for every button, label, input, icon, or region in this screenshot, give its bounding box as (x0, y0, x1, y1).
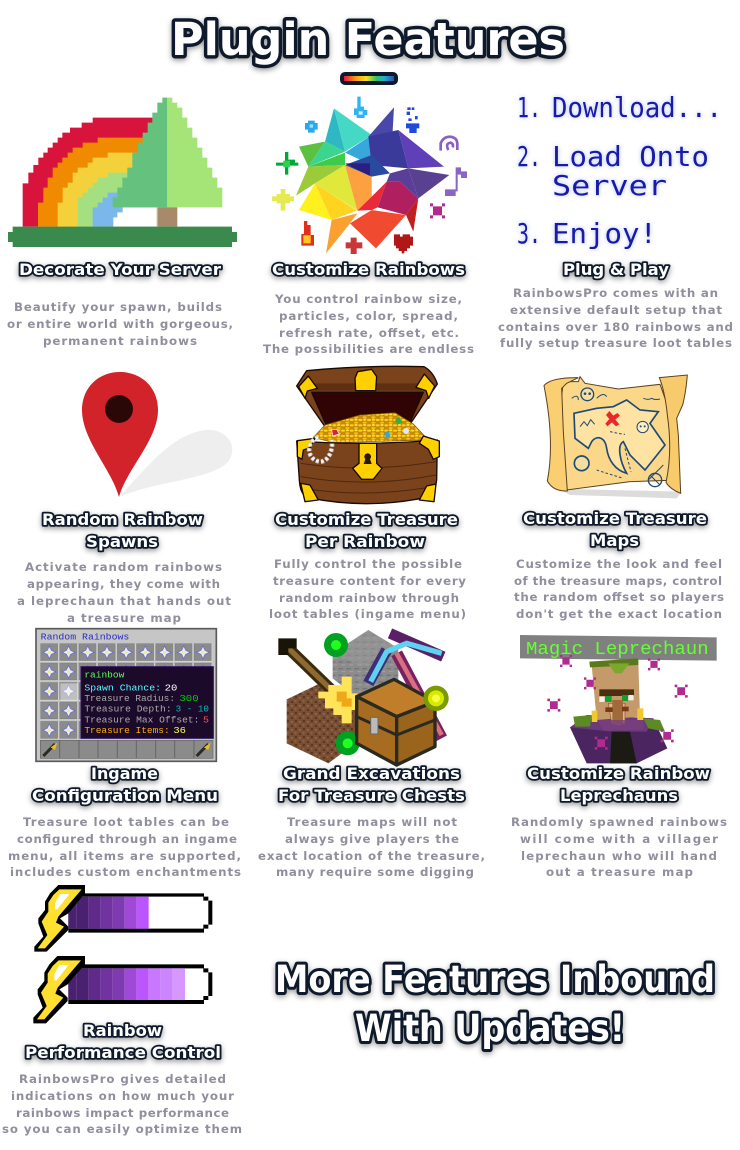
icon: inventory menu screenshot: 36 (173, 726, 186, 736)
steps list: 3. (517, 217, 541, 250)
panel: random rainbow spawns (17, 372, 232, 625)
heading: Customize Rainbows (272, 260, 465, 279)
panel: customize treasure maps (514, 375, 724, 621)
description: Beautify your spawn, builds (14, 300, 222, 314)
panel: customize rainbows (263, 97, 474, 356)
description: treasure content for every (273, 574, 466, 588)
description: the random offset so players (514, 590, 724, 604)
heading (523, 509, 707, 550)
description: extensive default setup that (510, 303, 722, 317)
steps list: Server (552, 169, 667, 202)
description: menu, all items are supported, (8, 849, 241, 863)
description (511, 815, 727, 879)
description: RainbowsPro gives detailed (19, 1072, 226, 1086)
icon: energy bars with lightning bolts (33, 885, 212, 1023)
heading: Per Rainbow (305, 532, 425, 551)
description: rainbows impact performance (16, 1106, 229, 1120)
description (17, 560, 231, 625)
icon: inventory menu screenshot: 300 (179, 694, 199, 704)
description (498, 286, 733, 350)
heading: For Treasure Chests (278, 786, 465, 805)
steps list (517, 91, 722, 250)
description: RainbowsPro comes with an (513, 286, 718, 300)
description: Randomly spawned rainbows (511, 815, 727, 829)
description: always give players the (285, 832, 459, 846)
description (7, 300, 233, 348)
title: Plugin Features (171, 13, 565, 66)
heading: Decorate Your Server (19, 260, 221, 279)
heading: Configuration Menu (32, 786, 218, 805)
description: The possibilities are endless (263, 342, 474, 356)
steps list: 2. (517, 140, 541, 173)
description: configured through an ingame (17, 832, 237, 846)
description (269, 557, 466, 621)
description: or entire world with gorgeous, (7, 317, 233, 331)
panel: grand excavations (258, 630, 485, 879)
description: Customize the look and feel (516, 557, 722, 571)
description: Fully control the possible (274, 557, 462, 571)
description: fully setup treasure loot tables (500, 336, 732, 350)
steps list: 1. (517, 91, 541, 124)
description: of the treasure maps, control (514, 574, 722, 588)
steps list: Download... (552, 91, 722, 124)
heading (275, 510, 458, 551)
description: indications on how much your (11, 1089, 234, 1103)
icon: pixel rainbow and tree (8, 98, 237, 247)
steps list: Load Onto (552, 140, 709, 173)
description: out a treasure map (546, 865, 693, 879)
heading: Plug & Play (563, 260, 670, 279)
panel: plug and play (498, 91, 733, 350)
icon: magic leprechaun villager: Magic Leprechaun (526, 638, 709, 660)
icon: map pin with shadow (82, 372, 232, 497)
heading: Maps (590, 531, 639, 550)
heading: Ingame (91, 764, 158, 783)
description: You control rainbow size, (274, 292, 462, 306)
description: Treasure maps will not (287, 815, 457, 829)
description: leprechaun who will hand (521, 849, 717, 863)
icon: inventory menu screenshot: 20 (165, 683, 177, 693)
heading (42, 510, 203, 551)
heading: Customize Treasure (275, 510, 458, 529)
heading: Customize Treasure (523, 509, 707, 528)
heading (25, 1021, 221, 1062)
heading: Spawns (86, 532, 158, 551)
description (263, 292, 474, 356)
panel: rainbow performance control (2, 885, 242, 1136)
icon: blocks, tools and chest (278, 630, 449, 765)
description: appearing, they come with (27, 577, 220, 591)
description: many require some digging (276, 865, 474, 879)
description: particles, color, spread, (279, 309, 458, 323)
icon: inventory menu screenshot: Treasure Depth: (84, 705, 172, 715)
callout: more features inbound (275, 958, 715, 1050)
rainbow divider (340, 72, 398, 85)
heading (527, 764, 710, 805)
description: a leprechaun that hands out (17, 594, 231, 608)
description: includes custom enchantments (10, 865, 241, 879)
heading (278, 764, 465, 805)
heading: Rainbow (83, 1021, 162, 1040)
icon: inventory menu screenshot: Treasure Radius: (84, 694, 175, 704)
icon: inventory menu screenshot (36, 629, 216, 761)
icon: inventory menu screenshot: 5 (203, 715, 209, 725)
heading: Random Rainbow (42, 510, 203, 529)
heading: Grand Excavations (283, 764, 460, 783)
description: contains over 180 rainbows and (498, 320, 733, 334)
heading: Customize Rainbow (527, 764, 710, 783)
heading: Performance Control (25, 1043, 221, 1062)
description: refresh rate, offset, etc. (279, 326, 459, 340)
particles (272, 97, 467, 254)
icon: inventory menu screenshot: Random Rainbows (41, 632, 129, 642)
heading (32, 764, 218, 805)
description: will come with a villager (520, 832, 718, 846)
icon: inventory menu screenshot: 3 - 10 (176, 705, 209, 715)
description (8, 815, 241, 879)
icon: magic leprechaun villager (520, 635, 717, 763)
description (258, 815, 485, 879)
description: permanent rainbows (43, 334, 197, 348)
icon: inventory menu screenshot: Treasure Items: (84, 726, 170, 736)
description: Treasure loot tables can be (23, 815, 229, 829)
steps list: Enjoy! (552, 217, 657, 250)
heading: Leprechauns (560, 786, 678, 805)
panel: decorate your server (7, 98, 237, 348)
description: so you can easily optimize them (2, 1122, 242, 1136)
icon: low-poly crystal star with particles (272, 97, 467, 254)
panel: customize rainbow leprechauns (511, 635, 727, 879)
description: exact location of the treasure, (258, 849, 485, 863)
description: Activate random rainbows (25, 560, 222, 574)
icon: inventory menu screenshot: Treasure Max Offset: (84, 715, 199, 725)
description: loot tables (ingame menu) (269, 607, 466, 621)
description (2, 1072, 242, 1136)
icon: treasure chest (297, 366, 439, 504)
description: random rainbow through (279, 591, 459, 605)
description (514, 557, 724, 621)
icon: treasure map scroll (544, 375, 687, 498)
callout: more features inbound: With Updates! (355, 1007, 625, 1050)
icon: inventory menu screenshot: rainbow (84, 671, 125, 681)
icon: inventory menu screenshot: Spawn Chance: (84, 683, 161, 693)
description: a treasure map (67, 611, 181, 625)
panel: customize treasure per rainbow (269, 366, 466, 621)
description: don't get the exact location (516, 607, 722, 621)
panel: ingame configuration menu (8, 629, 241, 879)
